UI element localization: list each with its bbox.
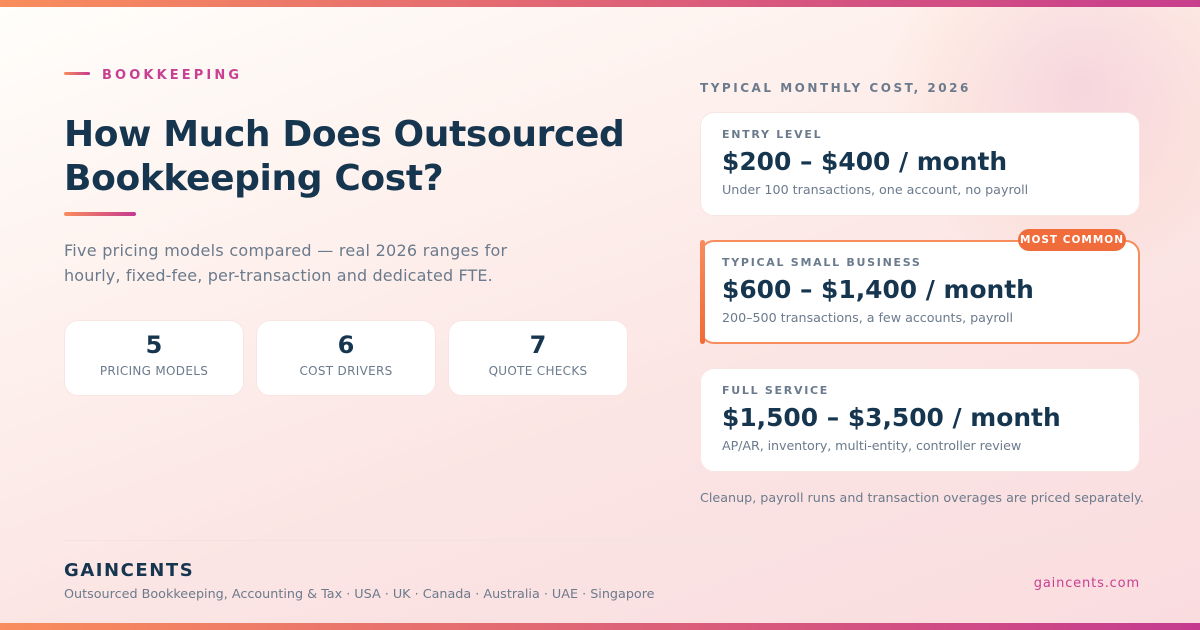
- typical price: $600 – $1,400 / month: [722, 275, 1034, 304]
- stat: quote checks: QUOTE CHECKS: [489, 364, 587, 378]
- bottom gradient bar: [0, 623, 1200, 630]
- typical description: 200–500 transactions, a few accounts, payroll: [722, 310, 1013, 325]
- corner glow: [885, 0, 1200, 280]
- eyebrow accent dash: [64, 72, 90, 75]
- subtitle: Five pricing models compared — real 2026 ranges for: [64, 241, 507, 260]
- entry level description: Under 100 transactions, one account, no payroll: [722, 182, 1028, 197]
- title: How Much Does Outsourced: [64, 114, 624, 155]
- stat: cost drivers: COST DRIVERS: [299, 364, 393, 378]
- brand name: GAINCENTS: [64, 560, 194, 581]
- pricing footnote: Cleanup, payroll runs and transaction overages are priced separately.: [700, 490, 1144, 505]
- highlight stripe: [700, 240, 705, 344]
- panel: full service: [700, 368, 1140, 472]
- badge: most common: MOST COMMON: [1020, 234, 1124, 246]
- panel: typical small business: [700, 240, 1140, 344]
- stat: quote checks: 7: [530, 331, 546, 359]
- badge: most common: [1018, 229, 1126, 251]
- stat: cost drivers: 6: [338, 331, 354, 359]
- subtitle: [64, 241, 508, 285]
- stat: pricing models: [64, 320, 244, 396]
- title: [64, 114, 624, 199]
- panel: entry level: [700, 112, 1140, 216]
- top gradient bar: [0, 0, 1200, 7]
- brand tagline: Outsourced Bookkeeping, Accounting & Tax · USA · UK · Canada · Australia · UAE · Singapore: [64, 587, 655, 602]
- entry level label: ENTRY LEVEL: [722, 128, 822, 141]
- subtitle: hourly, fixed-fee, per-transaction and dedicated FTE.: [64, 266, 493, 285]
- stat: pricing models: 5: [146, 331, 162, 359]
- full service description: AP/AR, inventory, multi-entity, controller review: [722, 438, 1021, 453]
- stat: quote checks: [448, 320, 628, 396]
- typical label: TYPICAL SMALL BUSINESS: [722, 256, 922, 269]
- right column heading: TYPICAL MONTHLY COST, 2026: [700, 81, 971, 95]
- entry level price: $200 – $400 / month: [722, 147, 1007, 176]
- title: Bookkeeping Cost?: [64, 158, 443, 199]
- website: gaincents.com: [1034, 576, 1140, 591]
- stat: pricing models: PRICING MODELS: [100, 364, 208, 378]
- full service price: $1,500 – $3,500 / month: [722, 403, 1061, 432]
- eyebrow label: BOOKKEEPING: [102, 68, 242, 83]
- full service label: FULL SERVICE: [722, 384, 829, 397]
- title underline: [64, 212, 136, 216]
- stat: cost drivers: [256, 320, 436, 396]
